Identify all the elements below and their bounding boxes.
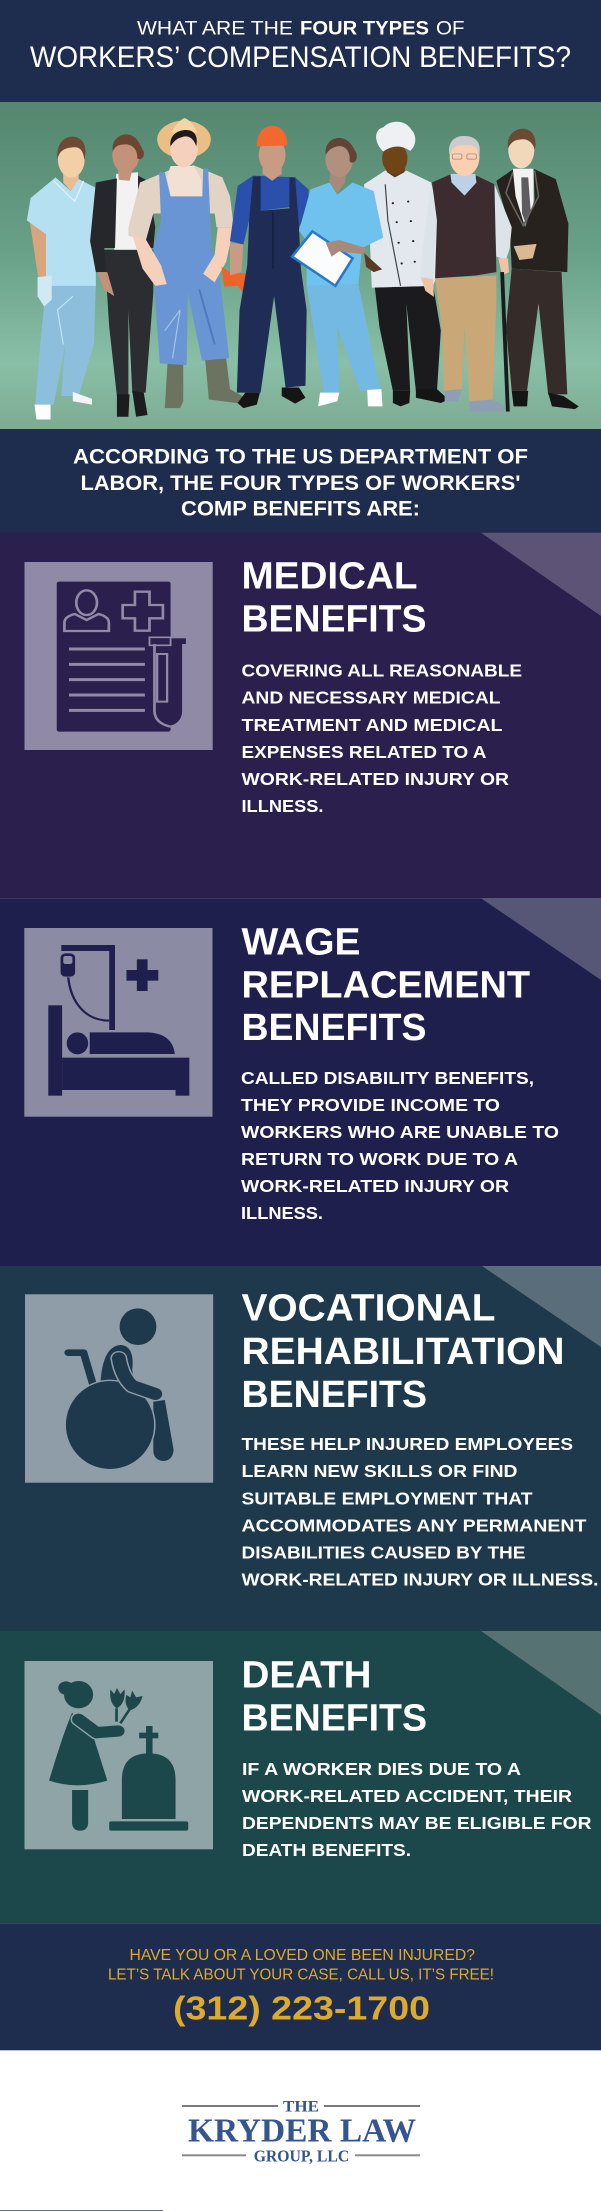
heading xyxy=(242,555,426,641)
description: ILLNESS. xyxy=(241,1203,323,1223)
description xyxy=(242,661,522,816)
description: IF A WORKER DIES DUE TO A xyxy=(242,1759,521,1779)
title: WHAT ARE THE xyxy=(137,18,293,40)
description: DEPENDENTS MAY BE ELIGIBLE FOR xyxy=(242,1813,592,1833)
description: DEATH BENEFITS. xyxy=(242,1840,411,1860)
panel: medical benefits xyxy=(0,533,601,898)
description xyxy=(242,1759,592,1860)
intro text: LABOR, THE FOUR TYPES OF WORKERS' xyxy=(80,472,520,495)
description: TREATMENT AND MEDICAL xyxy=(242,715,503,735)
icon: patient in hospital bed xyxy=(24,928,212,1117)
description: ACCOMMODATES ANY PERMANENT xyxy=(242,1515,587,1535)
description: WORK-RELATED INJURY OR xyxy=(242,769,509,789)
description: SUITABLE EMPLOYMENT THAT xyxy=(242,1488,533,1508)
title: FOUR TYPES xyxy=(300,18,429,40)
description: EXPENSES RELATED TO A xyxy=(242,742,487,762)
phone number: (312) 223-1700 xyxy=(173,1990,430,2027)
intro text: COMP BENEFITS ARE: xyxy=(181,498,420,520)
panel: call to action xyxy=(0,1923,601,2050)
worker: businessman xyxy=(496,129,579,409)
worker: older man with cane xyxy=(420,136,512,412)
worker: farmer in overalls xyxy=(128,118,245,408)
description: WORK-RELATED ACCIDENT, THEIR xyxy=(242,1786,572,1806)
heading: WAGE xyxy=(242,921,360,963)
panel: header xyxy=(0,0,601,102)
description: COVERING ALL REASONABLE xyxy=(242,661,522,681)
worker: business suit woman xyxy=(90,134,155,417)
logo: The Kryder Law Group, LLC xyxy=(182,2099,420,2166)
panel: death benefits xyxy=(0,1631,601,1923)
heading: MEDICAL xyxy=(242,555,418,597)
clipboard xyxy=(292,231,353,286)
worker: mechanic with hard hat xyxy=(230,126,309,408)
panel: illustrated workers xyxy=(0,102,601,429)
description: CALLED DISABILITY BENEFITS, xyxy=(241,1068,534,1088)
call to action text: LET’S TALK ABOUT YOUR CASE, CALL US, IT’S FREE! xyxy=(108,1966,494,1983)
description: THESE HELP INJURED EMPLOYEES xyxy=(242,1434,573,1454)
intro text xyxy=(73,446,528,520)
heading: BENEFITS xyxy=(242,1007,426,1049)
worker: medical scrubs xyxy=(27,137,96,419)
heading: REPLACEMENT xyxy=(242,965,530,1007)
logo: The Kryder Law Group, LLC: KRYDER LAW xyxy=(188,2113,416,2150)
heading: BENEFITS xyxy=(242,599,426,641)
panel: vocational rehabilitation benefits xyxy=(0,1266,601,1631)
panel: introduction xyxy=(0,429,601,533)
heading xyxy=(242,1655,427,1740)
worker: nurse with clipboard xyxy=(292,138,383,406)
icon: medical chart and test tube xyxy=(24,562,213,750)
description: WORK-RELATED INJURY OR xyxy=(241,1176,509,1196)
description: WORKERS WHO ARE UNABLE TO xyxy=(241,1122,559,1142)
description: ILLNESS. xyxy=(242,796,324,816)
description: THEY PROVIDE INCOME TO xyxy=(241,1095,500,1115)
icon: woman with flowers at gravestone xyxy=(24,1661,213,1849)
title: WORKERS’ COMPENSATION BENEFITS? xyxy=(30,41,571,74)
title xyxy=(30,18,571,74)
description: DISABILITIES CAUSED BY THE xyxy=(242,1542,526,1562)
heading xyxy=(242,921,530,1049)
heading: BENEFITS xyxy=(242,1698,427,1740)
call to action text: HAVE YOU OR A LOVED ONE BEEN INJURED? xyxy=(130,1947,475,1964)
heading: BENEFITS xyxy=(242,1374,427,1416)
intro text: ACCORDING TO THE US DEPARTMENT OF xyxy=(73,446,528,468)
heading: VOCATIONAL xyxy=(242,1288,496,1330)
call to action text xyxy=(108,1947,494,1983)
icon: orange wrench xyxy=(222,267,249,295)
heading: DEATH xyxy=(242,1655,372,1697)
worker: chef xyxy=(362,122,448,406)
title: OF xyxy=(436,18,464,40)
description xyxy=(242,1434,598,1589)
logo: The Kryder Law Group, LLC: GROUP, LLC xyxy=(254,2147,349,2166)
logo: The Kryder Law Group, LLC: THE xyxy=(283,2099,319,2116)
heading: REHABILITATION xyxy=(242,1331,564,1373)
heading xyxy=(242,1288,564,1416)
panel: wage replacement benefits xyxy=(0,898,601,1266)
description: WORK-RELATED INJURY OR ILLNESS. xyxy=(242,1569,598,1589)
description: AND NECESSARY MEDICAL xyxy=(242,688,501,708)
description: LEARN NEW SKILLS OR FIND xyxy=(242,1461,518,1481)
icon: person in wheelchair xyxy=(25,1294,213,1483)
description xyxy=(241,1068,559,1223)
description: RETURN TO WORK DUE TO A xyxy=(241,1149,518,1169)
